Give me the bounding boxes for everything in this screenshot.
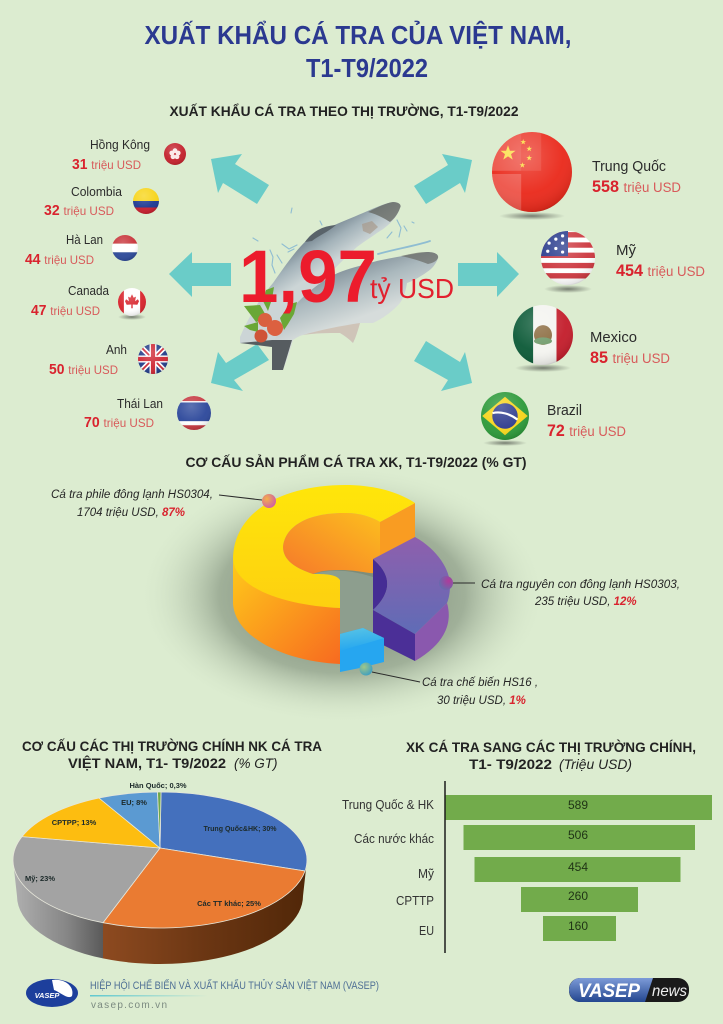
- market: Colombia: Colombia: [71, 184, 123, 199]
- heading: main export markets: (Triệu USD): [559, 757, 632, 772]
- heading: main export markets: T1- T9/2022: [469, 756, 552, 772]
- bar: China & HK 589: 589: [568, 798, 588, 812]
- flag: China: [492, 132, 572, 212]
- flag shadow: USA: [544, 285, 592, 293]
- main title: XUẤT KHẨU CÁ TRA CỦA VIỆT NAM,: [144, 19, 572, 50]
- lower fish head: [401, 252, 438, 264]
- callout: frozen fillet: [51, 489, 276, 519]
- slice: EU 8%: [99, 792, 160, 848]
- flag: Colombia: [133, 188, 159, 214]
- callout: frozen whole fish: 235 triệu USD, 12%: [534, 596, 637, 608]
- callout: frozen whole fish: [439, 576, 680, 608]
- shadow glow behind ring: [137, 465, 547, 725]
- market: Thailand: Thái Lan: [117, 396, 163, 411]
- logo: VASEP news: VASEP: [578, 981, 640, 1002]
- lower fish fin: [303, 323, 360, 343]
- market: China: Trung Quốc: [592, 158, 666, 175]
- upper fish dorsal fin: [305, 225, 336, 242]
- arrow: to Netherlands: [169, 252, 231, 297]
- pie labels: [25, 781, 277, 908]
- bar: other countries 506: 506: [568, 828, 588, 842]
- market: Brazil: Brazil: [547, 402, 582, 419]
- flag shadow: Canada: [118, 314, 146, 320]
- heading: market share: [22, 737, 322, 771]
- market: Brazil: 72 triệu USD: [547, 422, 626, 440]
- market: Mexico: Mexico: [590, 329, 637, 346]
- ring segment: purple 12%: [373, 537, 450, 661]
- flag: Canada: [118, 288, 146, 316]
- market: Colombia: 32 triệu USD: [44, 203, 114, 219]
- funnel bar chart: [342, 781, 712, 953]
- arrow: to China: [414, 154, 472, 204]
- total value: [239, 235, 454, 318]
- arrow: to Thailand: [211, 344, 269, 391]
- bar: other countries 506: [354, 825, 695, 850]
- heading: market share: CƠ CẤU CÁC THỊ TRƯỜNG CHÍNH NK CÁ TRA: [22, 737, 322, 754]
- main title: T1-T9/2022: [306, 53, 428, 83]
- market: Hong Kong: 31 triệu USD: [72, 157, 141, 173]
- bar: USA 454: 454: [568, 860, 588, 874]
- flag: Mexico: [513, 305, 573, 365]
- market: Hong Kong: [72, 139, 186, 170]
- upper fish: [240, 202, 401, 347]
- flag: Brazil: [481, 392, 529, 440]
- ring gap floor: [313, 571, 373, 638]
- bar: China & HK 589: [342, 795, 712, 820]
- market: UK: Anh: [106, 342, 127, 357]
- slice: China & HK 30%: [160, 792, 307, 871]
- callout: processed: [360, 662, 538, 707]
- flag shadow: Mexico: [515, 364, 571, 372]
- 3D ring chart: [233, 485, 450, 672]
- ring outer side: large segment: [233, 560, 340, 664]
- arrow: to Brazil: [414, 341, 472, 391]
- callout: frozen whole fish: Cá tra nguyên con đông lạnh HS0303,: [481, 579, 680, 591]
- ring segment: blue 1%: [340, 628, 384, 672]
- bar: CPTPP 260: [396, 887, 638, 912]
- pie labels: EU; 8%: [121, 798, 147, 807]
- ring top: large segment 87%: [233, 485, 415, 608]
- pie labels: Các TT khác; 25%: [197, 899, 261, 908]
- pie labels: CPTPP; 13%: [52, 818, 97, 827]
- fish illustration: [240, 202, 438, 370]
- market: Netherlands: [25, 234, 138, 266]
- bar: EU 160: 160: [568, 919, 588, 933]
- market: UK: 50 triệu USD: [49, 362, 118, 378]
- logo: VASEP: [26, 979, 78, 1007]
- bar: China & HK 589: Trung Quốc & HK: [342, 797, 434, 812]
- callout: processed: 30 triệu USD, 1%: [437, 695, 526, 707]
- flag shadow: Brazil: [483, 440, 527, 446]
- market: Thailand: [84, 396, 211, 431]
- market: China: 558 triệu USD: [592, 178, 681, 196]
- slice: CPTPP 13%: [22, 798, 160, 848]
- ring inner wall: orange: [283, 513, 380, 574]
- flag: Netherlands: [112, 235, 138, 261]
- callout: frozen fillet: Cá tra phile đông lạnh HS0304,: [51, 489, 213, 501]
- bar: USA 454: [418, 857, 680, 882]
- flag shadow: China: [499, 212, 565, 220]
- slice: South Korea 0.3%: [158, 792, 161, 848]
- heading: main export markets: [406, 738, 696, 772]
- bar: USA 454: Mỹ: [418, 866, 434, 881]
- pie labels: Trung Quốc&HK; 30%: [204, 824, 277, 833]
- pie side: brown: [103, 860, 307, 964]
- arrows: [169, 154, 519, 391]
- market: Netherlands: 44 triệu USD: [25, 252, 94, 268]
- market: China: [492, 132, 681, 220]
- slice: other markets 25%: [103, 848, 305, 928]
- market: UK: [50, 344, 168, 376]
- lower fish tail: [240, 340, 292, 370]
- bar: other countries 506: Các nước khác: [354, 831, 434, 846]
- ring cut face: orange: [380, 503, 415, 558]
- market: Mexico: 85 triệu USD: [590, 349, 670, 367]
- garnish: [244, 287, 297, 342]
- flag: USA: [541, 231, 595, 285]
- flag: Hong Kong: [164, 143, 186, 165]
- bar: EU 160: [419, 916, 616, 941]
- market: Netherlands: Hà Lan: [66, 232, 103, 247]
- upper fish head: [368, 202, 401, 222]
- total value: 1,97: [239, 235, 377, 318]
- flag: UK: [138, 344, 168, 374]
- logo: VASEP news: news: [652, 983, 687, 1000]
- arrow: to USA: [458, 252, 519, 297]
- market: Colombia: [44, 186, 159, 216]
- lower fish: [272, 252, 438, 370]
- callout: frozen fillet: 1704 triệu USD, 87%: [77, 507, 185, 519]
- arrow: to Hong Kong: [211, 154, 269, 204]
- pie side: grey: [13, 860, 103, 958]
- 3D pie chart: [13, 781, 307, 964]
- market: Brazil: [481, 392, 626, 446]
- bar: CPTPP 260: 260: [568, 889, 588, 903]
- total value: tỷ USD: [370, 273, 454, 304]
- website: vasep.com.vn: [91, 1000, 167, 1011]
- bar: CPTPP 260: CPTTP: [396, 893, 434, 908]
- heading: market share: (% GT): [234, 756, 278, 771]
- market: Mexico: [513, 305, 670, 372]
- main title: [144, 19, 572, 83]
- pie labels: Hàn Quốc; 0,3%: [129, 781, 187, 790]
- heading: main export markets: XK CÁ TRA SANG CÁC THỊ TRƯỜNG CHÍNH,: [406, 738, 696, 755]
- slice: USA 23%: [13, 837, 160, 923]
- heading: product structure: CƠ CẤU SẢN PHẨM CÁ TRA XK, T1-T9/2022 (% GT): [186, 453, 526, 470]
- bar: EU 160: EU: [419, 923, 434, 938]
- market: Canada: 47 triệu USD: [31, 303, 100, 319]
- market: Canada: Canada: [68, 283, 110, 298]
- water splash: [253, 208, 430, 273]
- logo: VASEP news: [569, 978, 689, 1002]
- market: USA: 454 triệu USD: [616, 262, 705, 280]
- market: USA: Mỹ: [616, 242, 636, 259]
- market: Thailand: 70 triệu USD: [84, 415, 154, 431]
- callout: processed: Cá tra chế biến HS16 ,: [422, 677, 538, 689]
- logo: VASEP: VASEP: [35, 991, 60, 1000]
- market: Canada: [31, 283, 146, 320]
- pie labels: Mỹ; 23%: [25, 874, 55, 883]
- market: USA: [541, 231, 705, 293]
- heading: market share: VIỆT NAM, T1- T9/2022: [68, 754, 226, 771]
- footer: [26, 978, 689, 1011]
- market: Hong Kong: Hồng Kông: [90, 137, 150, 152]
- organisation name: HIỆP HỘI CHẾ BIẾN VÀ XUẤT KHẨU THỦY SẢN VIỆT NAM (VASEP): [90, 979, 379, 992]
- heading: export by market: XUẤT KHẨU CÁ TRA THEO THỊ TRƯỜNG, T1-T9/2022: [170, 102, 519, 119]
- flag: Thailand: [177, 396, 211, 430]
